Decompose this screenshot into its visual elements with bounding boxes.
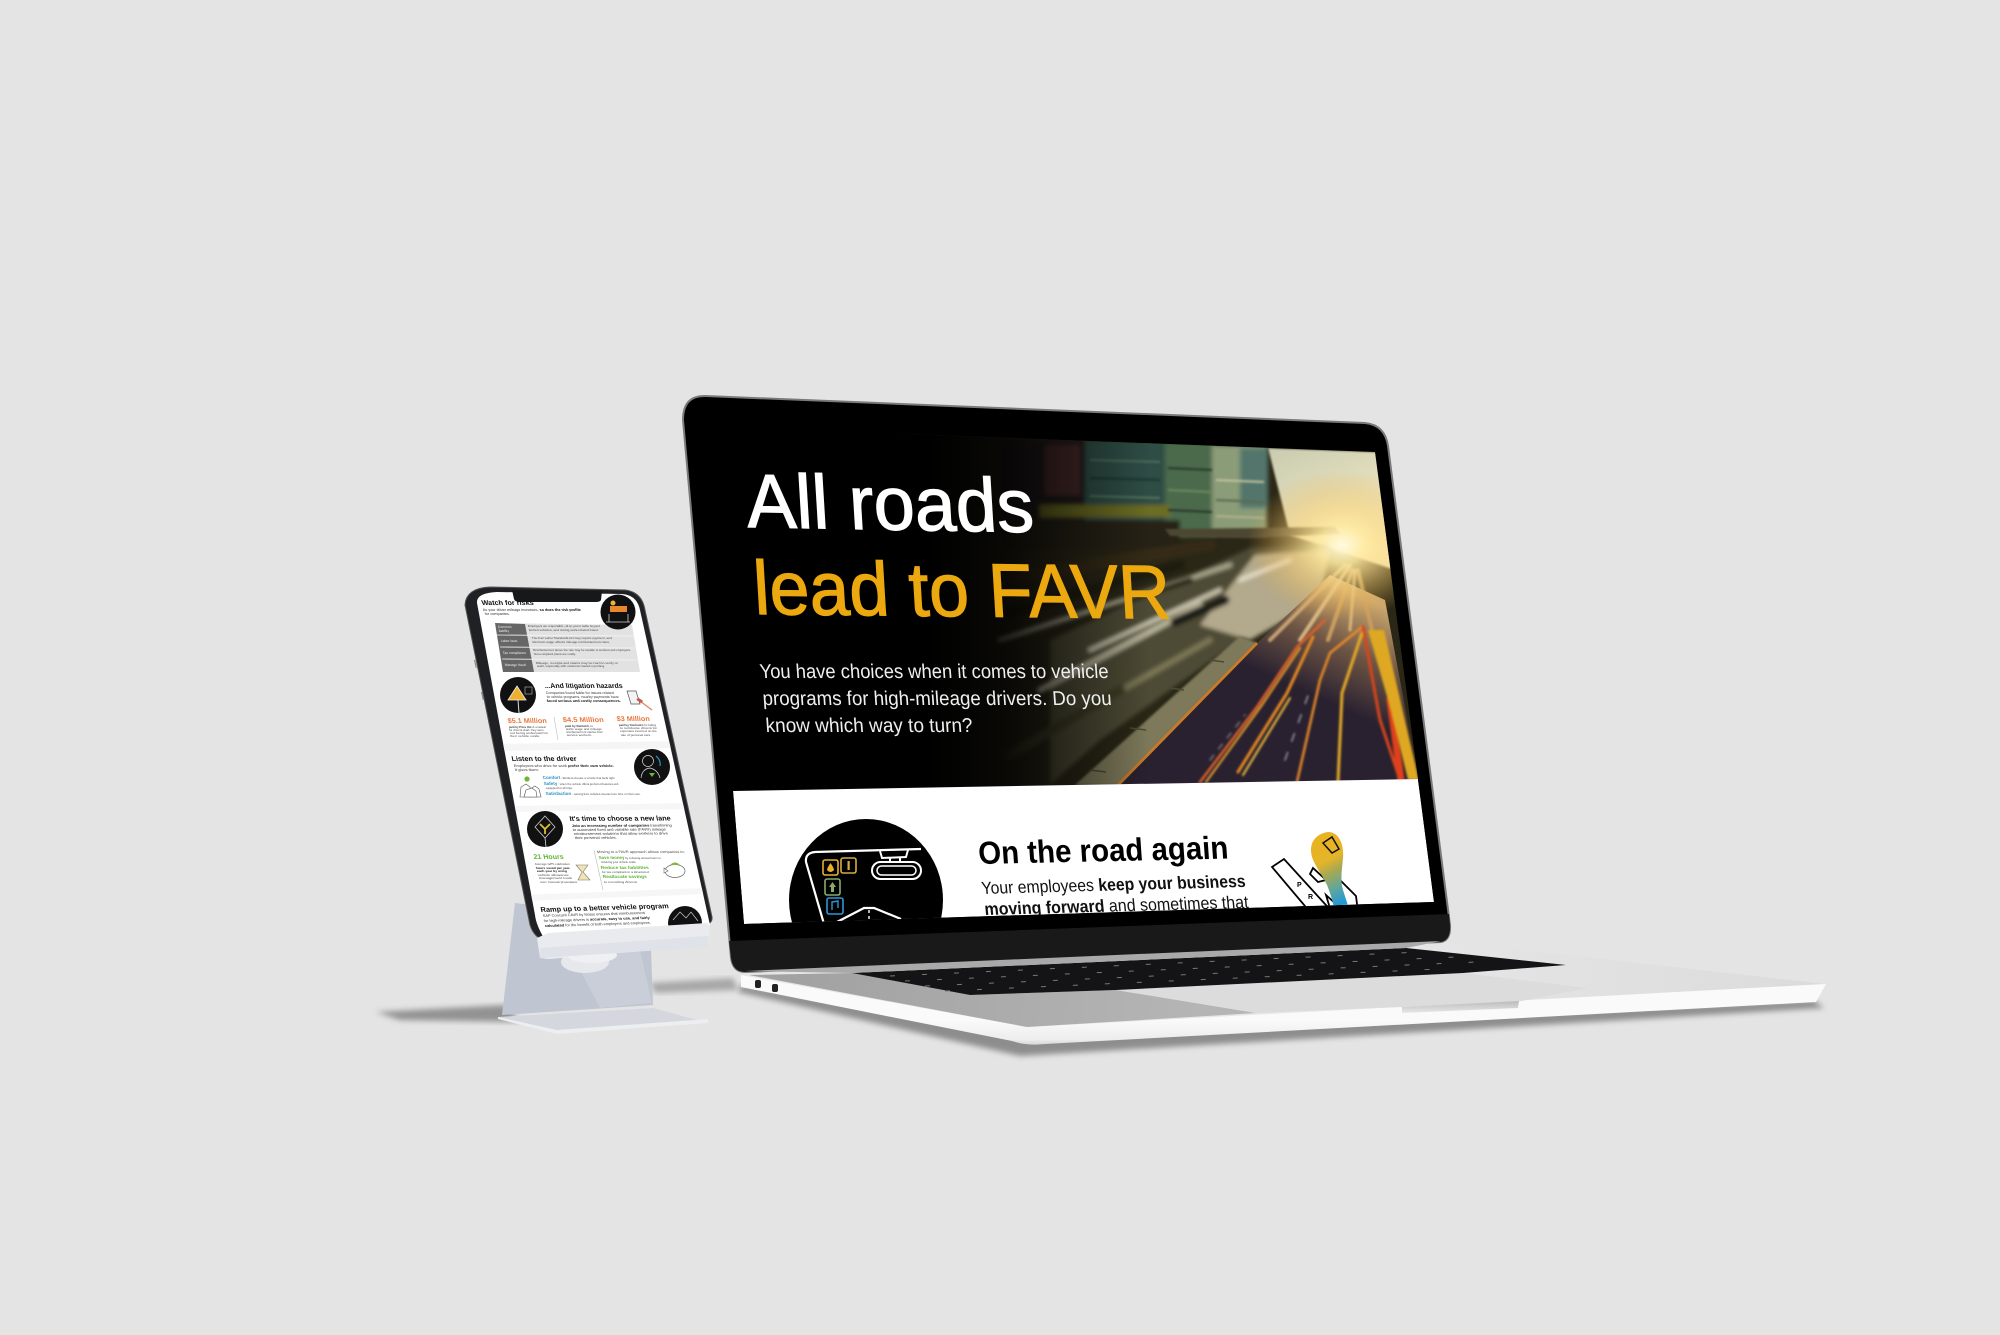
risk table: Non-compliant plans are costly. (533, 652, 576, 656)
risk table: minimum wage affects mileage reimbursement rates. (531, 640, 610, 644)
stat: 21 hours: management tools (538, 876, 573, 880)
benefits list: Safety : when the vehicle offers preferred features and (543, 781, 619, 786)
icon: gavel and document (627, 691, 652, 710)
icon: driver head circle (634, 749, 670, 785)
risk table (495, 623, 640, 672)
icon: bed on road circle (600, 594, 636, 630)
favr benefits list: for tax compliant in a structured (601, 870, 650, 874)
building window streaks (1090, 460, 1264, 518)
ramp up body (542, 911, 651, 928)
laptop shadow (738, 985, 1824, 1056)
phone holder ledge (537, 923, 710, 963)
risk table: liability (498, 629, 510, 633)
section body text (981, 875, 1249, 915)
new lane body: to automated fixed and variable rate (FAVR) mileage (572, 828, 666, 832)
risk table: Tax compliance (502, 651, 527, 655)
stand shadow (376, 1005, 520, 1022)
litigation intro: to vehicle programs, nearby payments have (546, 695, 619, 699)
watch for risks intro: for companies. (484, 612, 510, 616)
stat: $4.5 million: reimbursement claims from (566, 730, 604, 734)
buildings (1038, 440, 1271, 540)
stand hole (561, 951, 609, 973)
left fade to black (930, 435, 1142, 788)
guard wall (1075, 636, 1257, 785)
new lane body: reimbursement solutions that allow workers to drive (573, 832, 668, 836)
favr benefits list: Reallocate savings (602, 874, 648, 879)
risk table: Common (497, 625, 512, 629)
litigation intro: faced serious and costly consequences. (546, 699, 621, 703)
risk table: Labor laws (500, 639, 518, 643)
stat: $3 million: to reimburse drivers for (620, 726, 657, 730)
heading: ramp up: Ramp up to a better vehicle program (540, 903, 669, 914)
dashboard circle icon (789, 819, 943, 922)
laptop chin (729, 914, 1450, 972)
sky (1268, 448, 1395, 570)
listen intro: Employees who drive for work prefer their own vehicle. (513, 764, 614, 768)
heading: new lane: It's time to choose a new lane (569, 816, 671, 823)
favr benefits list: Reduce tax liabilities (600, 865, 650, 870)
gear shift icon: P (1297, 882, 1302, 889)
stat: 21 hours: each year by using (536, 869, 567, 873)
stat: $5.1 million: paid by Pizza Hut of a lawsuit (509, 725, 546, 729)
section heading: On the road again (977, 830, 1229, 871)
keyboard (852, 948, 1566, 995)
stat: 21 hours: over manual processes. (539, 880, 578, 884)
watch for risks intro (482, 608, 581, 616)
light trails (1200, 620, 1401, 782)
stat: $5.1 million: their vehicle costs. (510, 734, 540, 738)
sun glow (1250, 474, 1395, 614)
section body text: moving forward and sometimes that (983, 892, 1250, 919)
litigation intro: Companies found liable for issues related (545, 691, 614, 695)
stat: 21 hours: hours saved per year (535, 866, 571, 870)
icon: people group (520, 776, 541, 797)
risk table: Employers are responsible, all so you're liable beyond (527, 624, 601, 628)
listen intro (513, 764, 614, 772)
icon: road sign circle (527, 811, 563, 847)
litigation intro (545, 691, 621, 703)
new lane body (571, 824, 672, 840)
stat: $4.5 million: service workers. (567, 733, 592, 737)
hero paragraph: You have choices when it comes to vehicle (759, 661, 1109, 683)
heading: listen to the driver: Listen to the driver (511, 756, 578, 763)
favr benefits list: Moving to a FAVR approach allows companies to: (596, 850, 685, 854)
stat: 21 hours (533, 854, 578, 884)
laptop (683, 396, 1826, 1056)
mockup scene: laptop and phone on grey background (378, 395, 1826, 1060)
stat: 21 hours: 21 Hours (533, 854, 564, 861)
section heading: watch for risks: Watch for risks (481, 600, 534, 607)
trackpad notch (1402, 1001, 1519, 1013)
hero paragraph: know which way to turn? (765, 715, 973, 737)
trackpad (1116, 973, 1588, 1013)
yellow lane glow (1368, 630, 1419, 780)
heading: litigation hazards: ...And litigation hazards (544, 683, 623, 690)
hero paragraph (759, 661, 1112, 737)
palm rest grey area (749, 973, 1256, 1027)
ramp up body: for high-mileage drivers is accurate, easy to use, and fairly (543, 916, 650, 923)
ramp up body: SAP Concur® FAVR by Motus ensures that reimbursement (542, 911, 645, 918)
benefits list: Satisfaction : owning their vehicles means more time on their own. (545, 791, 641, 796)
stat: $4.5 million (562, 717, 604, 737)
phone body (465, 587, 712, 941)
phone side buttons (474, 660, 484, 700)
hero paragraph: programs for high-mileage drivers. Do you (762, 688, 1112, 710)
stand base plate (498, 1008, 708, 1034)
risk table: Mileage, receipts and claims may be hard to verify or (535, 661, 618, 665)
favr benefits list: Save money by reducing annual travel or (598, 855, 661, 860)
road surface (1118, 575, 1420, 787)
stat: $3 million: use of personal cars. (621, 733, 651, 737)
phone notch (512, 590, 602, 602)
benefits list (542, 775, 641, 796)
shadow between phone and laptop (650, 978, 738, 993)
risk table: The Fair Labor Standards Act may require payment, and (531, 636, 613, 640)
bridge (1165, 527, 1340, 538)
risk table: limited vehicles, and during work-related travel. (528, 628, 599, 632)
port two (772, 984, 778, 992)
stat: $3 million: paid by Starbucks for failing (619, 723, 657, 727)
deck surface (741, 942, 1826, 1027)
favr benefits list (596, 850, 685, 884)
watch for risks intro: As your driver mileage increases, so does the risk profile (482, 608, 581, 612)
stat: $5.1 million: $5.1 Million (507, 718, 547, 725)
stat: $4.5 million: settle wage and mileage (566, 727, 603, 731)
port one (755, 980, 761, 988)
favr benefits list: to recruiting drivers (603, 880, 638, 884)
front edge (741, 975, 1826, 1045)
favr benefits list: reducing your vehicle costs (600, 860, 636, 864)
section body text: Your employees keep your business (980, 871, 1247, 898)
warm light rays (1270, 565, 1372, 640)
screen white section (733, 779, 1434, 924)
listen intro: It gives them: (514, 768, 539, 772)
stand back support (502, 903, 653, 1015)
stat: $3 million: $3 Million (616, 716, 650, 723)
icon: hourglass (576, 865, 590, 880)
hero title line 1: All roads (744, 459, 1036, 549)
risk table: audit, especially with odometer-based reporting. (536, 664, 605, 668)
hero title line 2: lead to FAVR (751, 546, 1173, 636)
screen hero photo (900, 434, 1418, 786)
stat: 21 hours: vehicle allowance (537, 873, 570, 877)
risk table: Manage fraud (504, 663, 526, 667)
icon: piggy bank (664, 862, 685, 878)
benefits list: Comfort : Workers choose a vehicle that feels right (542, 775, 615, 780)
icon: mountain circle (668, 906, 702, 940)
phone stand (498, 903, 708, 1034)
stat: $4.5 million: paid by Rentokil , to (565, 724, 594, 728)
stat: $4.5 million: $4.5 Million (562, 717, 604, 724)
new lane body: Join an increasing number of companies transitioning (571, 824, 672, 828)
laptop lid (683, 396, 1450, 972)
stat: 21 hours: Average GPS calibration (534, 862, 571, 866)
gear shift icon (1270, 832, 1358, 906)
phone screen (476, 592, 710, 936)
ramp up body: calculated for the benefit of both employers and employees. (544, 921, 651, 928)
highway streaks (1000, 545, 1330, 785)
hinge strip (745, 941, 1441, 973)
risk table: Reimbursement above the rate may be taxable to workers and employers. (532, 648, 631, 652)
stat: $3 million: expenses incurred on the (620, 729, 658, 733)
gear shift icon: R (1308, 894, 1313, 901)
stat: $5.1 million: for drivers claim they were (509, 728, 545, 732)
stat: $5.1 million (507, 718, 548, 738)
phone (460, 585, 720, 945)
stat: $3 million (616, 716, 658, 737)
new lane body: their personal vehicles. (574, 836, 617, 840)
laptop base (741, 942, 1826, 1045)
road edge line (1118, 643, 1257, 785)
icon: warning sign circle (500, 677, 536, 713)
stat: $5.1 million: not being underpaid for (510, 731, 548, 735)
benefits list: equipped for all trips. (545, 786, 573, 790)
